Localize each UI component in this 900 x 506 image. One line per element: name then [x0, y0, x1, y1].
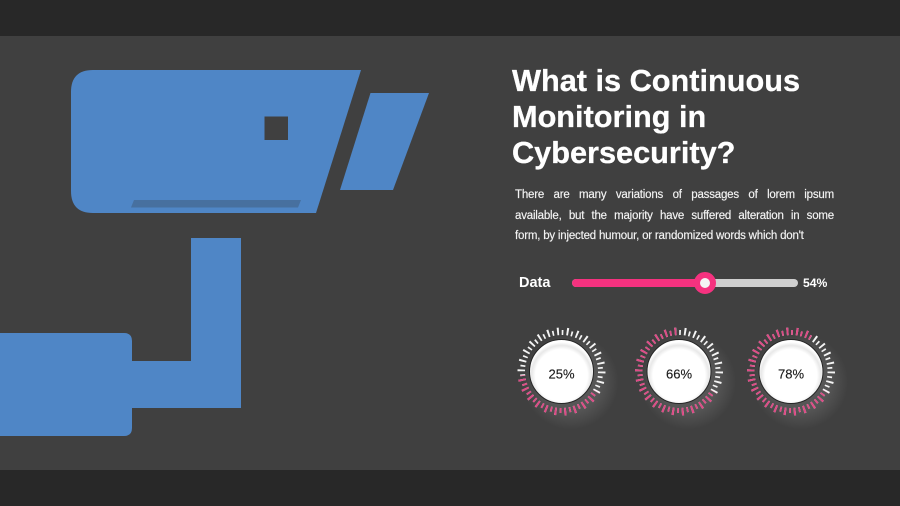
slider track: [572, 279, 798, 287]
icon: security camera: [0, 70, 429, 436]
camera body: [71, 70, 361, 213]
value: 78%: [778, 366, 804, 382]
value: 66%: [666, 366, 692, 382]
glow: [522, 334, 618, 430]
slider knob: [694, 272, 716, 294]
glow: [640, 334, 736, 430]
dial face: [530, 340, 594, 404]
camera front visor: [340, 93, 429, 190]
dial face: [759, 340, 823, 404]
gauge: 78%: [751, 331, 848, 430]
body paragraph: There are many variations of passages of lorem ipsum: [515, 189, 834, 201]
ticks white: [521, 331, 602, 412]
camera mount arm: [130, 238, 241, 408]
body paragraph: available, but the majority have suffered alteration in some: [515, 210, 834, 222]
title: Cybersecurity?: [512, 135, 735, 170]
camera wall base: [0, 333, 132, 436]
ticks white: [751, 331, 831, 412]
glow: [752, 334, 848, 430]
body paragraph: form, by injected humour, or randomized words which don't: [515, 230, 804, 242]
value: 25%: [548, 366, 575, 382]
slider: data 54%: [519, 272, 827, 294]
slider fill: [572, 279, 706, 287]
gauges: [518, 328, 841, 422]
camera lens indicator: [264, 116, 288, 140]
body paragraph: [515, 188, 834, 242]
ticks white: [639, 331, 719, 412]
slider label: Data: [519, 275, 550, 291]
title: What is Continuous: [512, 63, 800, 98]
dial face: [647, 340, 711, 404]
top band: [0, 0, 900, 36]
title: Monitoring in: [512, 99, 706, 134]
ticks pink: [518, 375, 600, 416]
camera underside slit: [131, 200, 301, 208]
ticks pink: [639, 331, 719, 412]
gauge: 66%: [639, 331, 736, 430]
slider value: 54%: [803, 276, 827, 290]
gauge: 25%: [521, 331, 618, 430]
title: [512, 63, 800, 170]
ticks pink: [751, 331, 831, 412]
bottom band: [0, 470, 900, 506]
